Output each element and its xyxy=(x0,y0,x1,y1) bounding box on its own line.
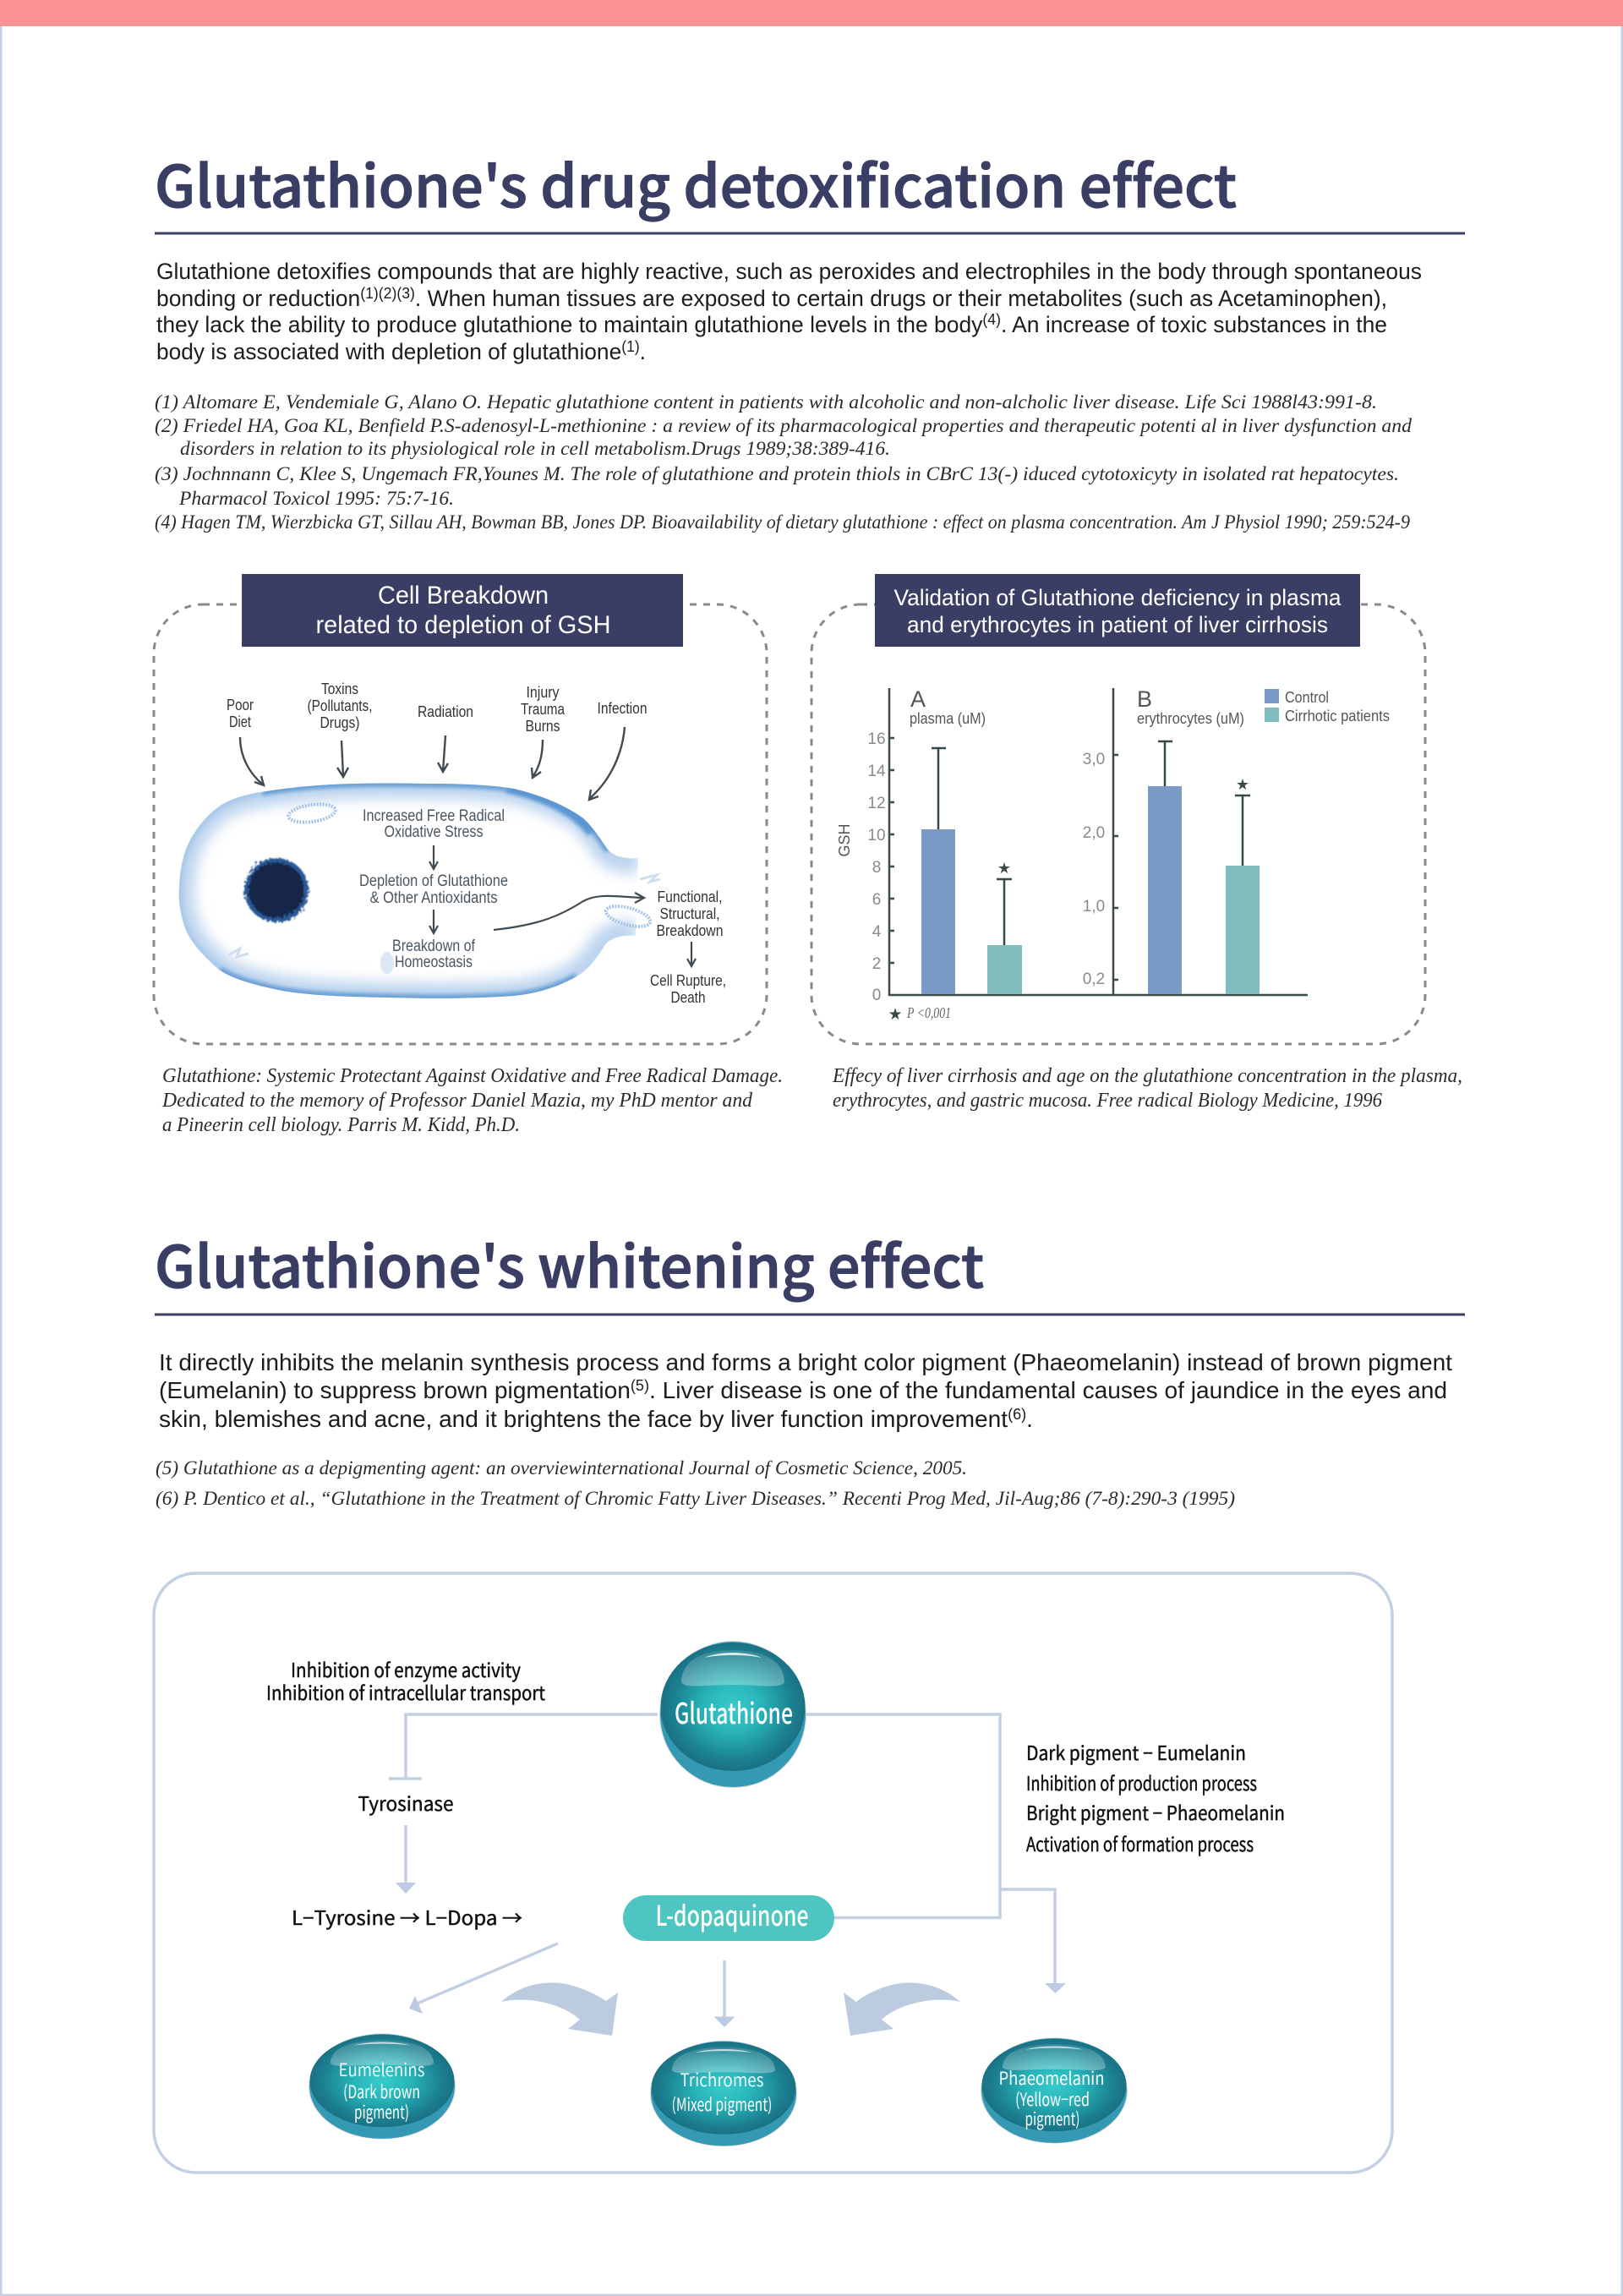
sphere: eumelenins: Eumelenins xyxy=(338,2057,425,2082)
chart label A: A xyxy=(910,686,926,712)
arrow: to trichromes xyxy=(713,1960,735,2027)
sphere: trichromes: (Mixed pigment) xyxy=(671,2091,773,2117)
text block: references 5-6: (5) Glutathione as a depigmenting agent: an overviewinternational Journal of Cosmetic Science, 2005. xyxy=(156,1457,967,1479)
legend: Control xyxy=(1285,689,1329,706)
axis labels: plasma: 14 xyxy=(867,763,886,780)
arrow: to eumelanins xyxy=(409,1943,558,2014)
sphere: phaeomelanin: pigment) xyxy=(1025,2106,1080,2131)
text block: detoxification intro: bonding or reduction xyxy=(156,286,364,311)
text block: detoxification intro: (1)(2)(3) xyxy=(360,285,415,302)
chart label B: B xyxy=(1137,686,1152,712)
sphere: phaeomelanin: (Yellow−red xyxy=(1015,2086,1090,2112)
labels: stressors: Poor xyxy=(227,696,254,713)
text block: detoxification intro: . When human tissues are exposed to certain drugs or their metabolites (such as Acetaminophen), xyxy=(415,286,1387,311)
sphere: glutathione xyxy=(659,1641,806,1788)
chart label B xyxy=(1137,686,1244,727)
nucleus xyxy=(244,858,309,922)
sphere: trichromes: Trichromes xyxy=(680,2067,764,2092)
axis labels: plasma: 2 xyxy=(872,955,881,973)
chart label B: erythrocytes (uM) xyxy=(1137,710,1244,727)
text block: references 1-4: (1) Altomare E, Vendemiale G, Alano O. Hepatic glutathione content in patients with alcoholic and non-alcholic liver disease. Life Sci 1988l43:991-8. xyxy=(155,391,1377,413)
sphere: phaeomelanin: Phaeomelanin xyxy=(999,2065,1104,2091)
heading: whitening xyxy=(155,1221,1465,1315)
text: cell outcome: Structural, xyxy=(659,905,720,922)
legend xyxy=(1265,689,1390,724)
text block: whitening intro: . xyxy=(1026,1406,1033,1432)
text block: detoxification intro: body is associated with depletion of glutathione xyxy=(156,339,633,364)
labels: stressors: Infection xyxy=(597,699,648,717)
pill: L-dopaquinone: L-dopaquinone xyxy=(656,1894,808,1934)
text: pigment notes: Bright pigment − Phaeomelanin xyxy=(1026,1797,1285,1826)
text: cell outcome: Functional, xyxy=(658,888,722,905)
text: pigment notes: Activation of formation process xyxy=(1026,1829,1254,1857)
axis labels: plasma xyxy=(867,730,886,1004)
panel: melanin pathway diagram xyxy=(154,1573,1392,2173)
text block: references 1-4: Pharmacol Toxicol 1995: 75:7-16. xyxy=(178,488,454,509)
chart label A: plasma (uM) xyxy=(910,710,986,727)
text block: detoxification intro: (4) xyxy=(982,311,1001,328)
text: pigment notes: Dark pigment − Eumelanin xyxy=(1026,1737,1246,1766)
sphere: glutathione: Glutathione xyxy=(675,1691,793,1732)
axis labels: plasma: 10 xyxy=(867,827,886,845)
text: inhibition xyxy=(266,1654,545,1706)
arrows: stressors into cell xyxy=(240,727,625,800)
labels: stressors: (Pollutants, xyxy=(308,697,372,714)
text block: detoxification intro: Glutathione detoxifies compounds that are highly reactive, such as peroxides and electrophiles in the body through spontaneous xyxy=(156,259,1422,284)
curved arrow: left to centre xyxy=(501,1982,618,2036)
bars: plasma xyxy=(921,748,1022,994)
heading: drug detoxification: Glutathione's drug detoxification effect xyxy=(155,140,1237,224)
pill: L-dopaquinone xyxy=(623,1894,834,1941)
text block: whitening intro: It directly inhibits the melanin synthesis process and forms a bright color pigment (Phaeomelanin) instead of brown pigment xyxy=(159,1349,1452,1375)
axis labels: erythrocytes: 2,0 xyxy=(1083,824,1105,842)
chart label A xyxy=(910,686,986,727)
text: pigment notes xyxy=(1026,1737,1285,1857)
y axis title: GSH xyxy=(836,823,853,857)
axis labels: plasma: 4 xyxy=(872,923,882,941)
text block: whitening intro: skin, blemishes and acne, and it brightens the face by liver function improvement xyxy=(159,1406,1005,1432)
panel heading: validation: Validation of Glutathione deficiency in plasma xyxy=(894,585,1342,610)
labels: stressors: Trauma xyxy=(521,700,566,718)
sphere: eumelenins: pigment) xyxy=(354,2099,409,2124)
text: cell outcome: Death xyxy=(671,988,705,1006)
significance note: ★ xyxy=(888,1005,903,1024)
bars: erythrocytes: ★ xyxy=(1236,776,1249,794)
text: cell process steps: Homeostasis xyxy=(395,954,473,971)
connector: glutathione to tyrosinase xyxy=(389,1714,658,1779)
labels: stressors: Burns xyxy=(526,717,560,735)
panel: glutathione deficiency chart xyxy=(812,574,1425,1044)
axis labels: plasma: 8 xyxy=(872,859,881,877)
label: tyrosinase: Tyrosinase xyxy=(358,1788,453,1817)
text block: whitening intro: . Liver disease is one of the fundamental causes of jaundice in the eyes and xyxy=(649,1377,1447,1403)
text block: whitening intro: (5) xyxy=(631,1377,649,1394)
text block: references 1-4: disorders in relation to its physiological role in cell metabolism.Drugs 1989;38:389-416. xyxy=(180,438,890,459)
labels: stressors: Drugs) xyxy=(320,713,360,731)
text: cell process steps xyxy=(359,807,508,971)
significance note: P <0,001 xyxy=(906,1004,951,1021)
text: inhibition: Inhibition of enzyme activity xyxy=(291,1654,521,1683)
labels: stressors: Radiation xyxy=(418,702,473,720)
text: cell outcome xyxy=(650,888,726,1006)
labels: stressors: Diet xyxy=(229,713,251,730)
caption: cell breakdown source: Dedicated to the memory of Professor Daniel Mazia, my PhD mentor and xyxy=(161,1090,753,1112)
labels: stressors: Toxins xyxy=(321,680,358,697)
top banner xyxy=(0,0,1623,26)
sphere: phaeomelanin xyxy=(981,2037,1128,2144)
panel heading: cell breakdown xyxy=(242,574,683,647)
panel: cell breakdown xyxy=(154,574,767,1044)
sphere: trichromes xyxy=(650,2041,797,2146)
text: cell process steps: Breakdown of xyxy=(392,938,476,955)
text block: references 5-6: (6) P. Dentico et al., “Glutathione in the Treatment of Chromic Fatty Liver Diseases.” Recenti Prog Med, Jil-Aug;86 (7-8):290-3 (1995) xyxy=(156,1488,1235,1509)
text block: detoxification intro: . xyxy=(640,339,646,364)
text: inhibition: Inhibition of intracellular transport xyxy=(266,1677,545,1706)
text block: references 1-4: (2) Friedel HA, Goa KL, Benfield P.S-adenosyl-L-methionine : a review of its pharmacological properties and therapeutic potenti al in liver dysfunction and xyxy=(155,415,1413,436)
axis labels: plasma: 0 xyxy=(872,987,881,1004)
caption: chart source: Effecy of liver cirrhosis and age on the glutathione concentration in the plasma, xyxy=(832,1065,1462,1087)
panel heading: validation: and erythrocytes in patient of liver cirrhosis xyxy=(907,612,1328,637)
text block: whitening intro: (Eumelanin) to suppress brown pigmentation xyxy=(159,1377,629,1403)
bars: plasma: ★ xyxy=(997,860,1011,877)
text: cell process steps: Oxidative Stress xyxy=(384,823,484,841)
text block: detoxification intro xyxy=(156,259,1422,364)
text: pigment notes: Inhibition of production process xyxy=(1026,1768,1257,1796)
legend: Cirrhotic patients xyxy=(1285,708,1390,724)
significance note xyxy=(888,1004,951,1024)
sphere: eumelenins xyxy=(309,2033,456,2140)
arrows: process steps xyxy=(429,845,696,966)
text block: whitening intro xyxy=(159,1349,1452,1432)
labels: stressors: Injury xyxy=(526,683,560,701)
axis labels: erythrocytes: 1,0 xyxy=(1083,898,1105,916)
caption: cell breakdown source xyxy=(161,1065,783,1136)
text block: whitening intro: (6) xyxy=(1008,1406,1026,1423)
connector: glutathione and L-dopaquinone to phaeomelanin xyxy=(806,1714,1066,1993)
text block: detoxification intro: (1) xyxy=(621,338,640,355)
axis labels: plasma: 6 xyxy=(872,891,881,909)
arrow: tyrosinase down xyxy=(396,1825,416,1894)
text: cell outcome: Cell Rupture, xyxy=(650,971,726,989)
panel heading: cell breakdown: related to depletion of GSH xyxy=(316,611,610,639)
panel heading: cell breakdown: Cell Breakdown xyxy=(378,582,549,610)
dashed frame xyxy=(154,604,767,1044)
text: cell process steps: & Other Antioxidants xyxy=(370,889,497,907)
axes xyxy=(889,688,1308,995)
caption: cell breakdown source: a Pineerin cell biology. Parris M. Kidd, Ph.D. xyxy=(162,1114,520,1136)
axis labels: erythrocytes: 0,2 xyxy=(1083,970,1105,988)
dashed frame xyxy=(812,604,1425,1044)
heading: whitening: Glutathione's whitening effect xyxy=(155,1221,984,1304)
diagram frame xyxy=(154,1573,1392,2173)
label: tyrosine dopa chain: L−Tyrosine → L−Dopa → xyxy=(292,1902,522,1931)
axis labels: plasma: 16 xyxy=(867,730,886,748)
illustration: cell body xyxy=(179,783,660,998)
axis labels: erythrocytes xyxy=(1083,751,1105,988)
text block: references 1-4 xyxy=(155,391,1413,533)
bar chart xyxy=(836,686,1390,1024)
text block: detoxification intro: . An increase of toxic substances in the xyxy=(1001,312,1387,337)
text: cell outcome: Breakdown xyxy=(656,921,724,939)
labels: stressors xyxy=(227,680,648,735)
curved arrow: right to centre xyxy=(844,1982,960,2036)
axis labels: erythrocytes: 3,0 xyxy=(1083,751,1105,768)
axis labels: plasma: 12 xyxy=(867,795,886,812)
panel heading: validation xyxy=(875,574,1360,647)
text block: references 5-6 xyxy=(156,1457,1235,1509)
sphere: eumelenins: (Dark brown xyxy=(343,2079,420,2104)
text: cell process steps: Depletion of Glutathione xyxy=(359,872,508,890)
organelles xyxy=(287,801,336,825)
caption: chart source: erythrocytes, and gastric mucosa. Free radical Biology Medicine, 1996 xyxy=(833,1090,1382,1112)
text block: detoxification intro: they lack the ability to produce glutathione to maintain glutathione levels in the body xyxy=(156,312,1000,337)
caption: chart source xyxy=(832,1065,1462,1112)
bars: erythrocytes xyxy=(1148,741,1260,994)
text block: references 1-4: (4) Hagen TM, Wierzbicka GT, Sillau AH, Bowman BB, Jones DP. Bioavailability of dietary glutathione : effect on plasma concentration. Am J Physiol 1990; 259:524-9 xyxy=(155,511,1410,533)
caption: cell breakdown source: Glutathione: Systemic Protectant Against Oxidative and Free Radical Damage. xyxy=(162,1065,783,1087)
text: cell process steps: Increased Free Radical xyxy=(363,807,505,825)
text block: references 1-4: (3) Jochnnann C, Klee S, Ungemach FR,Younes M. The role of glutathione and protein thiols in CBrC 13(-) iduced cytotoxicyty in isolated rat hepatocytes. xyxy=(155,463,1399,484)
